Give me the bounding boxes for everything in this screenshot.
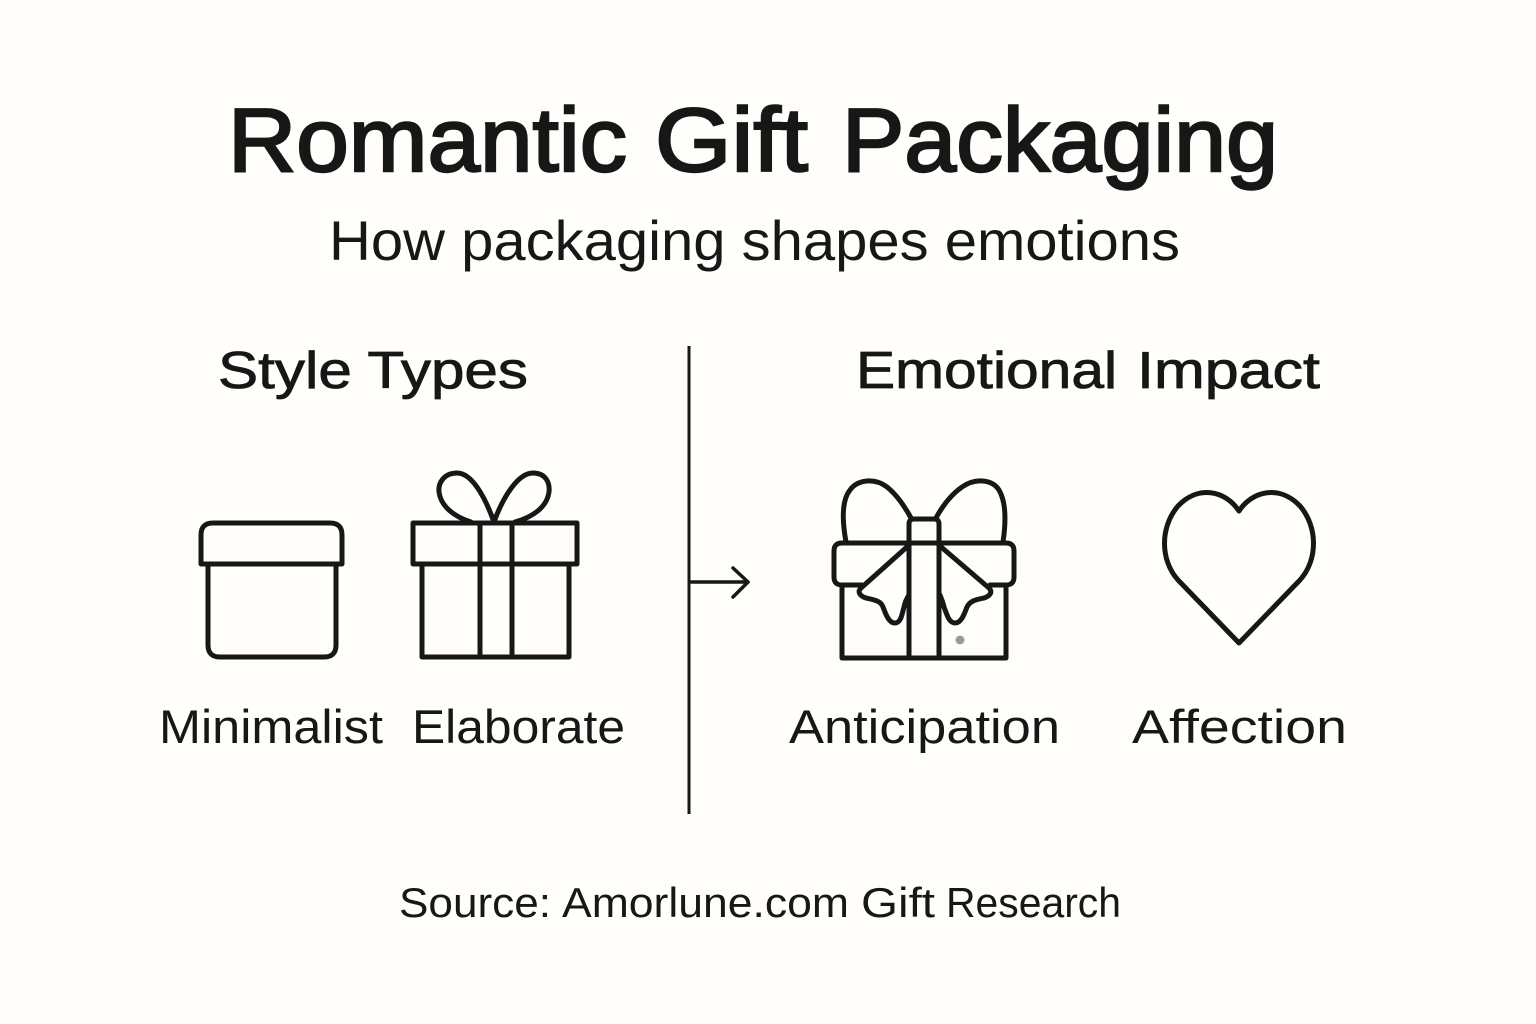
divider line: [688, 346, 690, 814]
source note: Research: [946, 879, 1121, 926]
source note: [399, 879, 1121, 926]
source note: Source:: [399, 879, 551, 926]
subtitle: How packaging shapes emotions: [329, 209, 1180, 272]
icon: gift with large bow: [834, 481, 1014, 658]
heading: emotional impact: [856, 342, 1321, 400]
arrow: [690, 568, 748, 597]
heading: emotional impact: Emotional: [856, 342, 1117, 400]
heading: style types: Style Types: [218, 342, 528, 400]
source note: Gift: [861, 879, 935, 926]
label: affection: Affection: [1132, 700, 1347, 753]
icon: elaborate gift box: [413, 473, 577, 657]
title: [228, 91, 1278, 191]
icon: minimalist box: [201, 523, 342, 657]
heading: emotional impact: Impact: [1137, 342, 1321, 400]
icon: small grey dot on gift: [956, 636, 964, 644]
icon: heart: [1164, 493, 1314, 643]
label: elaborate: Elaborate: [412, 700, 625, 753]
title: Romantic: [228, 91, 627, 191]
label: anticipation: Anticipation: [789, 700, 1060, 753]
title: Packaging: [842, 91, 1278, 191]
source note: Amorlune.com: [562, 879, 849, 926]
label: minimalist: Minimalist: [159, 700, 383, 753]
title: Gift: [655, 91, 808, 191]
